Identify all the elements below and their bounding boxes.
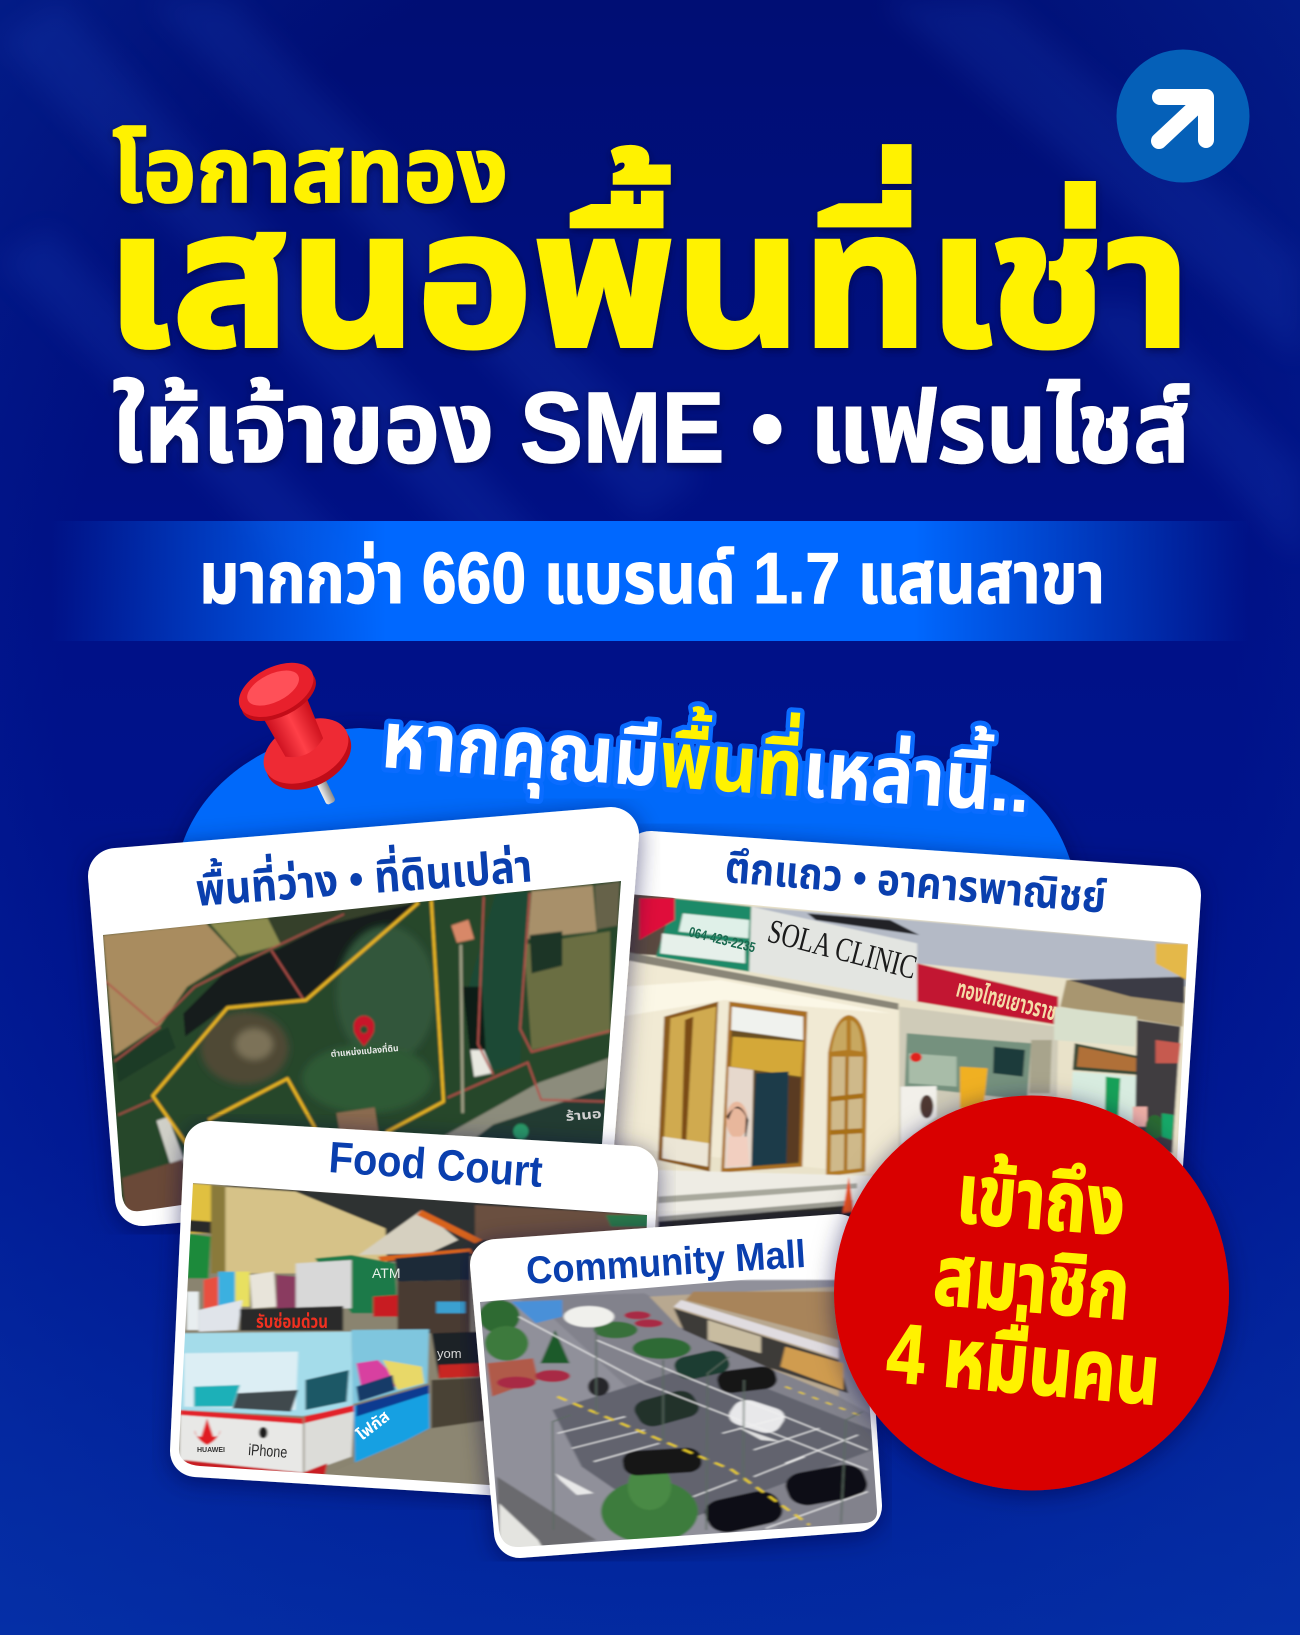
banner: brands and branches [50, 521, 1250, 641]
icon: arrow badge [1116, 50, 1250, 182]
photo: storefront: 064-423-2235 [687, 923, 757, 955]
label: food court: Food Court [327, 1133, 545, 1197]
photo: parking lot [470, 1280, 887, 1553]
label: vacant land: พื้นที่ว่าง • ที่ดินเปล่า [194, 834, 534, 916]
photo: aerial land plot: ร้านอ [565, 1106, 602, 1124]
photo: storefront [614, 894, 1188, 1228]
label: shophouse: ตึกแถว • อาคารพาณิชย์ [723, 843, 1108, 923]
photo: phone kiosk: รับซ่อมด่วน [256, 1311, 328, 1333]
callout: reach 40,000 members: เข้าถึง [954, 1146, 1128, 1253]
card: shophouse [600, 843, 1222, 1250]
callout: reach 40,000 members: สมาชิก [931, 1228, 1133, 1337]
photo: phone kiosk: HUAWEI [197, 1447, 225, 1454]
panel: blue hump [176, 728, 1078, 890]
card: community mall [470, 1233, 887, 1553]
photo: aerial land plot: ตำแหน่งแปลงที่ดิน [330, 1041, 399, 1059]
heading: offer rental space: เสนอพื้นที่เช่า [106, 145, 1191, 387]
heading: golden opportunity: โอกาสทอง [112, 120, 508, 222]
photo: phone kiosk: iPhone [248, 1442, 288, 1462]
card: vacant land [95, 834, 631, 1228]
label: community mall: Community Mall [525, 1233, 807, 1293]
photo: storefront: ทองไทยเยาวราช [954, 975, 1059, 1026]
heading: if you have these spaces: หากคุณมีพื้นที่เหล่านี้.. [379, 684, 1034, 833]
photo: phone kiosk: yom [437, 1346, 462, 1361]
photo: storefront: SOLA CLINIC [764, 913, 920, 987]
card: food court [160, 1133, 669, 1500]
icon: red push pin [226, 649, 372, 823]
callout: reach 40,000 members [834, 1096, 1229, 1490]
photo: phone kiosk [179, 1183, 647, 1485]
banner: brands and branches: มากกว่า 660 แบรนด์ 1.7 แสนสาขา [199, 539, 1105, 619]
photo: phone kiosk: ATM [372, 1265, 401, 1281]
callout: reach 40,000 members: 4 หมื่นคน [883, 1293, 1165, 1423]
heading: for SME and franchise owners: ให้เจ้าของ SME • แฟรนไชส์ [112, 372, 1190, 484]
photo: aerial land plot [95, 876, 631, 1228]
photo: phone kiosk: โฟกัส [354, 1408, 393, 1444]
